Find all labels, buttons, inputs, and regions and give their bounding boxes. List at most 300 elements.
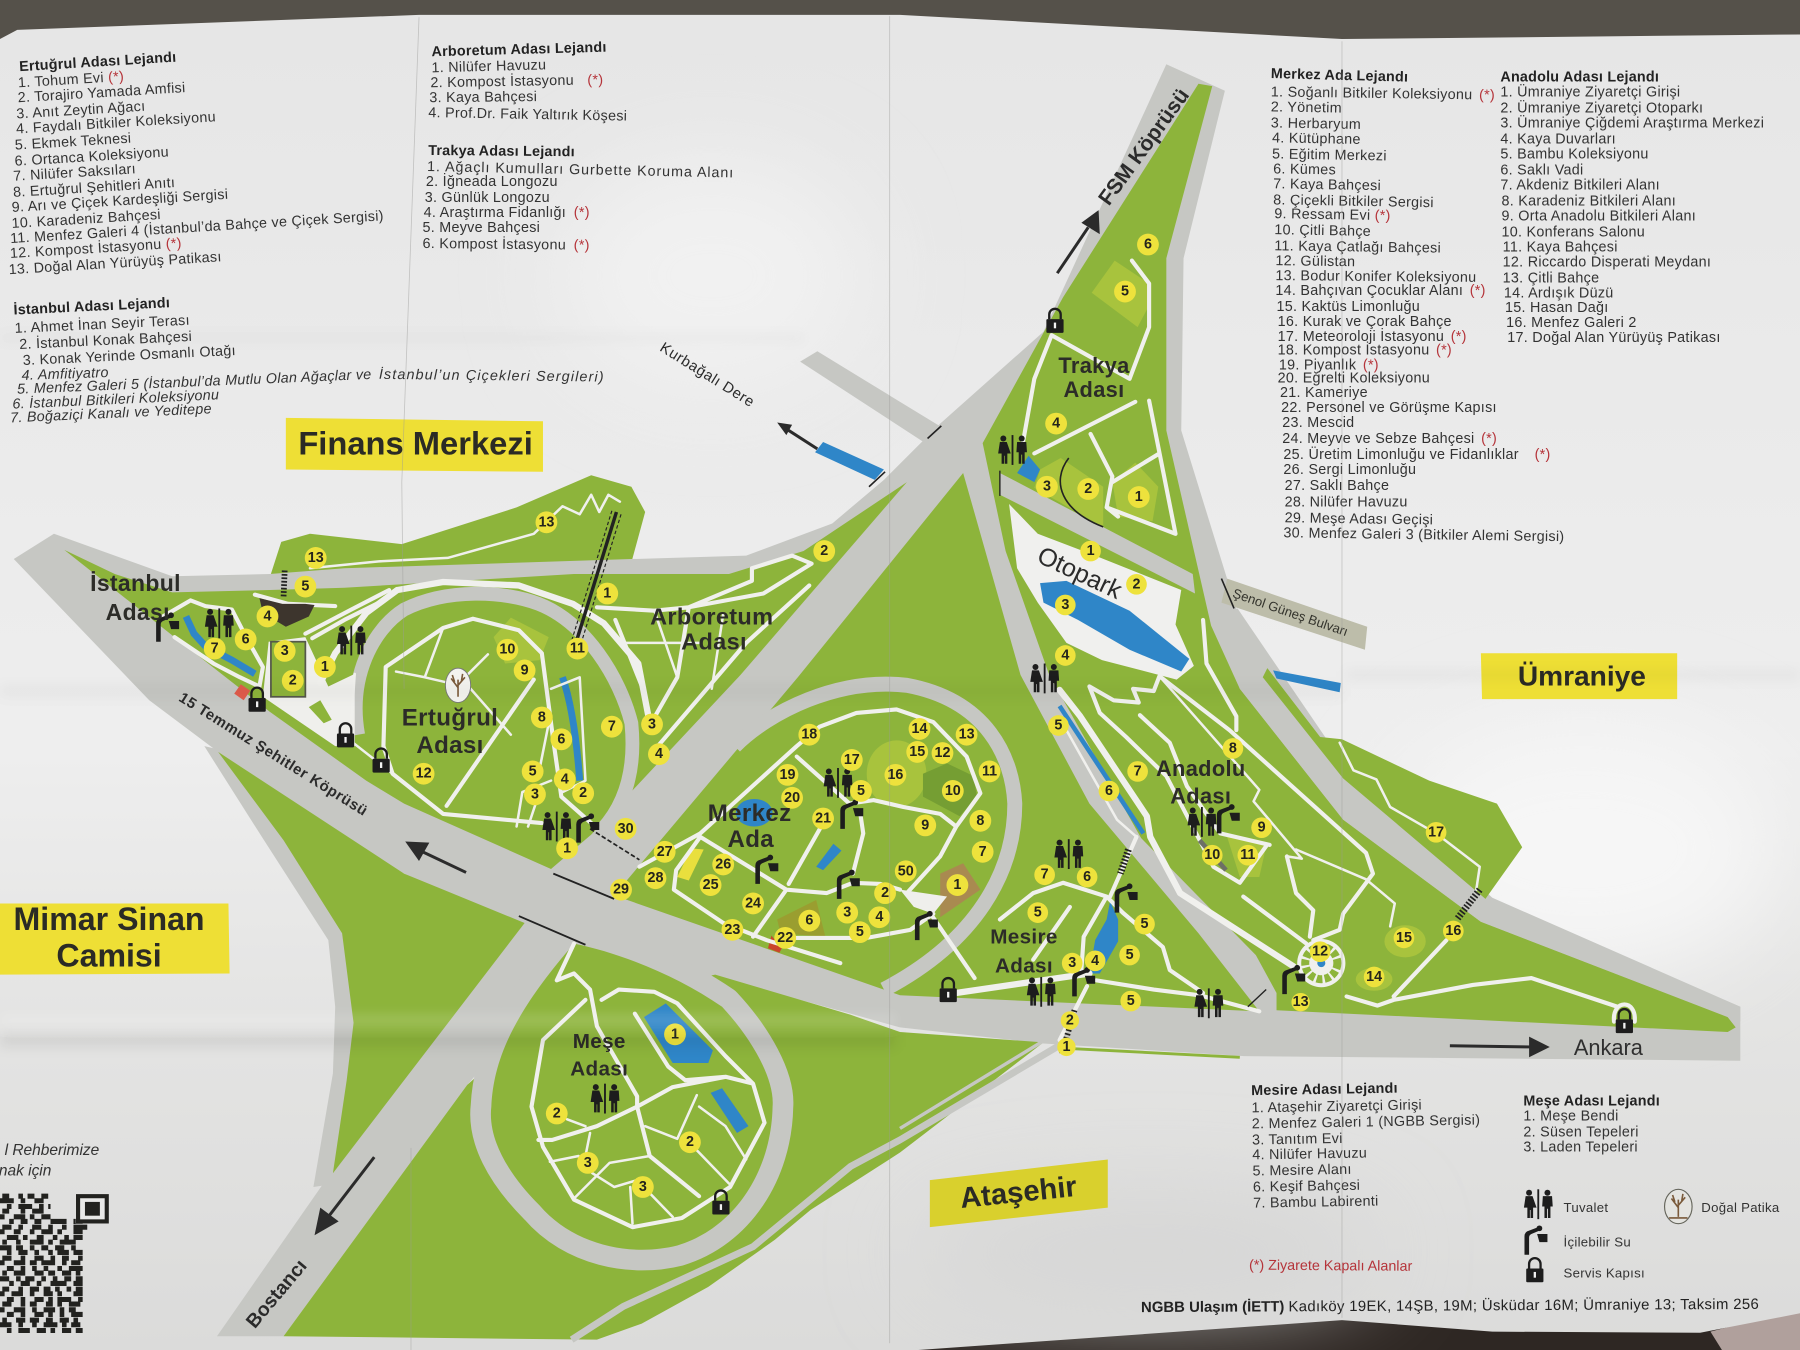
legend: Merkez Ada: 26. Sergi Limonluğu (1283, 462, 1416, 478)
numbered markers: Merkez Ada: 5 (856, 924, 864, 940)
legend: Mesire Adası: 4. Nilüfer Havuzu (1252, 1145, 1367, 1163)
yellow bed: Merkez (677, 848, 704, 880)
legend: Anadolu Adası: 6. Saklı Vadi (1500, 162, 1583, 178)
plaza: Merkez (900, 890, 947, 914)
numbered markers: İstanbul Adası: 1 (321, 659, 329, 675)
numbered markers: Ertuğrul Adası: 4 (561, 771, 569, 787)
numbered markers: Ertuğrul Adası: 13 (538, 514, 554, 530)
island name: Merkez Ada: Merkez (708, 800, 792, 827)
island name: Merkez Ada: Ada (727, 826, 774, 853)
numbered markers: Merkez Ada: 8 (976, 813, 984, 829)
legend: Anadolu Adası: 5. Bambu Koleksiyonu (1500, 146, 1649, 162)
canal: Ümraniye side (1273, 670, 1341, 692)
numbered markers: Ertuğrul Adası: 6 (557, 731, 565, 747)
numbered markers: Anadolu Adası (1048, 541, 1464, 1011)
dark table under the sheet (804, 1297, 1800, 1350)
road: Kurbağalı strip (800, 351, 941, 443)
numbered markers: Ertuğrul Adası (413, 511, 637, 859)
legend: Trakya Adası (422, 143, 734, 254)
legend: Mesire Adası: 1. Ataşehir Ziyaretçi Girişi (1251, 1097, 1422, 1116)
numbered markers: Ertuğrul Adası: 3 (531, 786, 539, 802)
numbered markers: Merkez Ada: 9 (921, 817, 929, 833)
legend: Arboretum Adası: 2. Kompost İstasyonu (*) (430, 70, 603, 91)
green: east hill (1263, 668, 1522, 899)
numbered markers: Arboretum Adası: 4 (655, 746, 663, 762)
numbered markers: Anadolu Adası: 16 (1445, 923, 1461, 939)
lake: Otopark (1040, 581, 1189, 672)
legend: Anadolu Adası: 16. Menfez Galeri 2 (1506, 315, 1637, 331)
legend: Anadolu Adası: 14. Ardışık Düzü (1504, 285, 1614, 301)
legend: Anadolu Adası: 3. Ümraniye Çiğdemi Araştırma Merkezi (1500, 113, 1764, 131)
numbered markers: Anadolu Adası: 1 (1087, 543, 1095, 559)
legend: Anadolu Adası: 12. Riccardo Disperati Meydanı (1503, 254, 1711, 270)
legend: İstanbul Adası (10, 294, 604, 426)
white area: Otopark (1009, 504, 1194, 680)
numbered markers: Anadolu Adası: 10 (1204, 847, 1220, 863)
legend: İstanbul Adası: 4. Amfitiyatro (21, 365, 109, 384)
green bed: İstanbul (309, 700, 332, 723)
QR caption: l Rehberimize (5, 1142, 100, 1159)
legend: Anadolu Adası: 7. Akdeniz Bitkileri Alanı (1500, 177, 1660, 193)
arrow: Bostancı (315, 1157, 374, 1235)
road sign: Şenol Güneş Bulvarı: Şenol Güneş Bulvarı (1231, 586, 1350, 639)
numbered markers: Anadolu Adası: 4 (1061, 647, 1069, 663)
key: natural trail: Doğal Patika (1701, 1200, 1780, 1215)
numbered markers: Arboretum Adası: 3 (648, 716, 656, 732)
pond: Meşe lake 1 (644, 1003, 713, 1063)
icon: natural trail emblem on map (445, 668, 471, 703)
legend: Mesire Adası: 5. Mesire Alanı (1252, 1162, 1352, 1179)
legend: Merkez Ada: 10. Çitli Bahçe (1274, 222, 1371, 240)
legend: Merkez Ada: 9. Ressam Evi (*) (1274, 206, 1391, 224)
legend: Mesire Adası: 6. Keşif Bahçesi (1253, 1178, 1360, 1196)
key: drinking water (1524, 1225, 1631, 1255)
patch: Trakya 1 (1112, 463, 1158, 521)
QR code (0, 1194, 109, 1330)
road ring: Merkez (735, 684, 1015, 990)
numbered markers: Ertuğrul Adası: 11 (570, 641, 585, 657)
numbered markers: Arboretum Adası: 2 (820, 543, 828, 559)
numbered markers: İstanbul Adası: 13 (308, 550, 324, 566)
key: service gate (1526, 1258, 1645, 1282)
legend: Merkez Ada: 21. Kameriye (1280, 385, 1368, 401)
numbered markers: Trakya Adası (1036, 234, 1159, 508)
numbered markers: Mesire Adası: 3 (1068, 955, 1076, 971)
road label: Ankara: Ankara (1574, 1035, 1644, 1060)
island name: Trakya Adası: Adası (1063, 377, 1125, 402)
island name: Trakya Adası: Trakya (1058, 353, 1130, 378)
district badge: Finans Merkezi (286, 418, 543, 472)
legend: Meşe Adası: Meşe Adası Lejandı (1523, 1093, 1660, 1109)
numbered markers: İstanbul Adası: 2 (289, 673, 297, 689)
legend: Meşe Adası: 1. Meşe Bendi (1523, 1108, 1619, 1124)
numbered markers: Trakya Adası: 5 (1121, 284, 1129, 300)
island name: Meşe Adası: Meşe (573, 1030, 626, 1053)
legend: Anadolu Adası: 15. Hasan Dağı (1505, 300, 1609, 316)
road label: FSM Köprüsü: FSM Köprüsü (1094, 84, 1194, 210)
numbered markers: Mesire Adası (1027, 864, 1155, 1056)
legend: Merkez Ada: 15. Kaktüs Limonluğu (1277, 299, 1420, 315)
label: Otopark: Otopark (1033, 541, 1126, 605)
numbered markers: İstanbul Adası: 5 (301, 579, 309, 595)
district badge: Finans Merkezi: Finans Merkezi (298, 425, 533, 462)
island name: Arboretum Adası: Arboretum (650, 603, 773, 629)
legend: Anadolu Adası: 13. Çitli Bahçe (1503, 270, 1599, 286)
district badge: Ümraniye (1481, 653, 1677, 699)
numbered markers: Merkez Ada: 11 (982, 763, 997, 779)
legend: Ertuğrul Adası: 13. Doğal Alan Yürüyüş Patikası (8, 249, 222, 278)
legend: Merkez Ada: 22. Personel ve Görüşme Kapısı (1281, 400, 1497, 416)
numbered markers: Merkez Ada: 26 (715, 856, 731, 872)
paper lighting (562, 161, 1779, 1303)
patch: Merkez 10 (923, 763, 977, 816)
legend: Arboretum Adası (428, 40, 627, 125)
numbered markers: Anadolu Adası: 2 (1132, 576, 1140, 592)
arrow: Ankara (1450, 1037, 1550, 1057)
red building: Merkez (768, 936, 782, 953)
legend: Ertuğrul Adası: 11. Menfez Galeri 4 (İstanbul’da Bahçe ve Çiçek Sergisi) (10, 206, 384, 247)
legend: Merkez Ada: 3. Herbaryum (1271, 115, 1361, 133)
legend: Merkez Ada: Merkez Ada Lejandı (1271, 66, 1408, 86)
trail: Finans hill (310, 495, 620, 568)
legend: Ertuğrul Adası: 3. Anıt Zeytin Ağacı (16, 99, 146, 122)
thin road strips: south-east (572, 1037, 1240, 1340)
key: toilet: Tuvalet (1564, 1200, 1608, 1215)
legend: İstanbul Adası: 2. İstanbul Konak Bahçesi (19, 327, 192, 353)
numbered markers: Ertuğrul Adası: 30 (618, 821, 634, 837)
canal: Kurbağalı Dere (815, 442, 884, 480)
numbered markers: Merkez Ada: 29 (613, 882, 629, 898)
island name: Meşe Adası: Adası (570, 1058, 628, 1081)
black bridge lines (284, 426, 1480, 1054)
green: west band with İstanbul and Ertuğrul islands (64, 482, 907, 869)
numbered markers: Meşe Adası: 1 (671, 1026, 679, 1042)
legend: Arboretum Adası: Arboretum Adası Lejandı (431, 40, 607, 60)
legend: Meşe Adası: 3. Laden Tepeleri (1523, 1139, 1638, 1155)
patch: Trakya 5 (1092, 261, 1149, 327)
numbered markers: Merkez Ada: 23 (724, 922, 740, 938)
legend: Anadolu Adası: 8. Karadeniz Bitkileri Alanı (1502, 193, 1676, 209)
legend: Merkez Ada: 19. Piyanlık (*) (1279, 358, 1379, 374)
legend: Anadolu Adası: Anadolu Adası Lejandı (1500, 70, 1659, 86)
legend: Trakya Adası: 6. Kompost İstasyonu (*) (422, 234, 590, 254)
island name: Mesire Adası: Adası (995, 954, 1053, 977)
dark strip: Anadolu 10 (1200, 840, 1226, 870)
numbered markers: Meşe Adası: 2 (686, 1134, 694, 1150)
island name: Anadolu Adası: Anadolu (1156, 756, 1246, 781)
numbered markers: Merkez Ada: 16 (887, 767, 903, 783)
numbered markers: Mesire Adası: 5 (1127, 993, 1135, 1009)
legend: Trakya Adası: 5. Meyve Bahçesi (422, 220, 540, 236)
numbered markers: Ertuğrul Adası: 2 (579, 785, 587, 801)
transport note: NGBB Ulaşım (İETT) Kadıköy 19EK, 14ŞB, 19M; Üsküdar 16M; Ümraniye 13; Taksim 256 (1141, 1295, 1759, 1316)
numbered markers: Trakya Adası: 3 (1043, 479, 1051, 495)
numbered markers: Anadolu Adası: 13 (1293, 994, 1309, 1010)
pond: Anadolu channel (1060, 706, 1143, 833)
arrow: FSM (1057, 210, 1100, 273)
island name: Ertuğrul Adası: Ertuğrul (402, 705, 498, 732)
paths: Ertuğrul (383, 619, 591, 823)
legend: Merkez Ada: 5. Eğitim Merkezi (1272, 146, 1387, 164)
road: Meşe ring (491, 944, 773, 1250)
legend: Anadolu Adası: 1. Ümraniye Ziyaretçi Girişi (1500, 82, 1680, 100)
legend: Ertuğrul Adası (0, 38, 386, 278)
numbered markers: Merkez Ada: 1 (953, 877, 961, 893)
numbered markers: Merkez Ada (610, 718, 1000, 949)
legend: Merkez Ada: 4. Kütüphane (1272, 130, 1361, 148)
numbered markers: İstanbul Adası (204, 547, 336, 692)
legend: Anadolu Adası (1500, 70, 1764, 346)
numbered markers: Merkez Ada: 15 (909, 744, 925, 760)
legend: Trakya Adası: 3. Günlük Longozu (425, 190, 550, 206)
numbered markers: Anadolu Adası: 5 (1054, 718, 1062, 734)
numbered markers: Merkez Ada: 21 (815, 810, 831, 826)
legend: Mesire Adası (1251, 1079, 1482, 1212)
numbered markers: Mesire Adası: 5 (1034, 905, 1042, 921)
numbered markers: Meşe Adası: 2 (553, 1106, 561, 1122)
numbered markers: Mesire Adası: 1 (1062, 1039, 1070, 1055)
garden box: İstanbul 2-3 (271, 642, 305, 697)
island name: Anadolu Adası: Adası (1170, 784, 1231, 809)
legend: Mesire Adası: 3. Tanıtım Evi (1252, 1131, 1343, 1149)
key: drinking water: İçilebilir Su (1564, 1235, 1631, 1250)
numbered markers: Trakya Adası: 4 (1052, 416, 1060, 432)
numbered markers: Anadolu Adası: 8 (1229, 740, 1237, 756)
key: natural trail (1665, 1189, 1780, 1224)
paths: Meşe (532, 944, 765, 1227)
island name: İstanbul Adası: İstanbul (90, 570, 181, 596)
district badge: Mimar Sinan Camisi (0, 901, 230, 975)
legend: Merkez Ada: 7. Kaya Bahçesi (1273, 176, 1381, 194)
legend: Meşe Adası (1523, 1093, 1660, 1155)
district badge: Mimar Sinan Camisi: Camisi (56, 938, 162, 974)
district badge: Ataşehir: Ataşehir (959, 1171, 1078, 1215)
trail loop: Ankara gate (1614, 1004, 1635, 1022)
legend: Merkez Ada: 12. Gülistan (1275, 253, 1355, 270)
numbered markers: Anadolu Adası: 11 (1240, 847, 1255, 863)
island name: Ertuğrul Adası: Adası (416, 732, 484, 759)
road sign: Şenol Güneş Bulvarı (1221, 579, 1367, 650)
green: south-west triangle (218, 752, 525, 1173)
pond: Mesire lake (1089, 901, 1118, 973)
legend: Ertuğrul Adası: 2. Torajiro Yamada Amfisi (17, 80, 186, 106)
paths: Merkez (639, 709, 980, 963)
numbered markers: Merkez Ada: 3 (843, 905, 851, 921)
patch: Merkez 6 (777, 900, 825, 937)
legend: Ertuğrul Adası: 6. Ortanca Koleksiyonu (14, 144, 169, 170)
legend: Ertuğrul Adası: 4. Faydalı Bitkiler Koleksiyonu (16, 109, 216, 137)
arrow: 15 Temmuz (405, 841, 466, 872)
numbered markers: Mesire Adası: 5 (1126, 947, 1134, 963)
legend: Anadolu Adası: 11. Kaya Bahçesi (1503, 239, 1618, 255)
legend: Mesire Adası: Mesire Adası Lejandı (1251, 1081, 1398, 1099)
numbered markers: Mesire Adası: 2 (1066, 1013, 1074, 1029)
legend: Merkez Ada: 27. Saklı Bahçe (1285, 478, 1389, 494)
island: Meşe Adası (491, 944, 773, 1250)
road label: 15 Temmuz Şehitler Köprüsü: 15 Temmuz Şehitler Köprüsü (176, 689, 371, 820)
road: Şenol Güneş Bulvarı crossing (1000, 473, 1195, 593)
numbered markers: Trakya Adası: 1 (1135, 489, 1143, 505)
fold lines (402, 16, 1342, 1350)
legend: Anadolu Adası: 10. Konferans Salonu (1502, 224, 1645, 240)
numbered markers: Merkez Ada: 2 (881, 885, 889, 901)
numbered markers: Merkez Ada: 10 (945, 783, 961, 799)
legend: Anadolu Adası: 4. Kaya Duvarları (1500, 131, 1616, 147)
numbered markers: Merkez Ada: 19 (780, 767, 795, 783)
numbered markers: İstanbul Adası: 7 (211, 641, 219, 657)
numbered markers: Meşe Adası: 3 (639, 1179, 647, 1195)
green hill with walking trail (270, 475, 645, 577)
patch: Ertuğrul 10 (494, 618, 549, 664)
legend: Merkez Ada: 30. Menfez Galeri 3 (Bitkiler Alemi Sergisi) (1283, 525, 1565, 545)
numbered markers: Anadolu Adası: 6 (1105, 783, 1113, 799)
numbered markers: Ertuğrul Adası: 5 (529, 763, 537, 779)
numbered markers: Meşe Adası: 3 (584, 1155, 592, 1171)
numbered markers: Merkez Ada: 5 (857, 783, 865, 799)
legend: Mesire Adası: 7. Bambu Labirenti (1253, 1193, 1379, 1212)
road ring: Ertuğrul (356, 594, 632, 829)
pond: Ertuğrul stream (562, 677, 580, 781)
district badge: Mimar Sinan Camisi: Mimar Sinan (14, 901, 205, 937)
legend: Trakya Adası: 4. Araştırma Fidanlığı (*) (424, 205, 590, 221)
patch: Trakya 2-3 (1034, 458, 1103, 527)
numbered markers: Anadolu Adası: 17 (1428, 824, 1444, 840)
pond: Merkez small (816, 844, 841, 870)
numbered markers: Ertuğrul Adası: 7 (608, 719, 616, 735)
island name: Arboretum Adası: Adası (681, 629, 747, 655)
numbered markers: Anadolu Adası: 3 (1061, 597, 1069, 613)
legend: Ertuğrul Adası: 7. Nilüfer Saksıları (13, 161, 136, 185)
legend: Arboretum Adası: 1. Nilüfer Havuzu (431, 57, 546, 76)
road: Ümraniye strip lower branch (1219, 608, 1740, 1022)
numbered markers: Mesire Adası: 7 (1041, 867, 1049, 883)
numbered markers: Ertuğrul Adası: 12 (416, 766, 432, 782)
numbered markers: Ertuğrul Adası: 9 (521, 662, 529, 678)
numbered markers: Merkez Ada: 27 (657, 844, 673, 860)
numbered markers: Merkez Ada: 12 (935, 745, 950, 761)
numbered markers: Merkez Ada: 17 (844, 752, 860, 768)
numbered markers: Ertuğrul Adası: 10 (499, 642, 515, 658)
legend: Merkez Ada (1271, 66, 1565, 545)
icons: service gates on map (249, 309, 1633, 1215)
numbered markers: Merkez Ada: 14 (912, 721, 928, 737)
legend: Meşe Adası: 2. Süsen Tepeleri (1523, 1124, 1639, 1140)
legend: Merkez Ada: 29. Meşe Adası Geçişi (1285, 510, 1433, 528)
legend: Ertuğrul Adası: Ertuğrul Adası Lejandı (19, 50, 177, 75)
legend: Merkez Ada: 1. Soğanlı Bitkiler Koleksiyonu (*) (1271, 84, 1495, 104)
legend: Anadolu Adası: 9. Orta Anadolu Bitkileri Alanı (1502, 208, 1696, 224)
numbered markers: Ertuğrul Adası: 8 (538, 709, 546, 725)
numbered markers: Merkez Ada: 18 (801, 727, 817, 743)
paths: Trakya (1023, 261, 1176, 534)
legend: İstanbul Adası: 7. Boğaziçi Kanalı ve Yeditepe (10, 401, 212, 426)
numbered markers: Merkez Ada: 50 (898, 863, 914, 879)
paths: Arboretum (597, 556, 812, 746)
legend: Merkez Ada: 17. Meteoroloji İstasyonu (*) (1278, 327, 1467, 345)
district badge: Ataşehir (930, 1159, 1108, 1227)
legend: İstanbul Adası: 5. Menfez Galeri 5 (İstanbul’da Mutlu Olan Ağaçlar ve (17, 366, 372, 398)
legend: İstanbul Adası: İstanbul’un Çiçekleri Sergileri) (379, 366, 604, 386)
fabric at bottom right corner (1710, 1309, 1800, 1350)
legend: Trakya Adası: 1. Ağaçlı Kumulları Gurbette Koruma Alanı (427, 159, 734, 181)
numbered markers: Mesire Adası: 6 (1083, 869, 1091, 885)
note: closed areas: (*) Ziyarete Kapalı Alanlar (1249, 1258, 1413, 1275)
legend: Ertuğrul Adası: 10. Karadeniz Bahçesi (11, 207, 161, 232)
legend: İstanbul Adası: İstanbul Adası Lejandı (13, 294, 170, 319)
numbered markers: Anadolu Adası: 15 (1396, 930, 1412, 946)
pond: İstanbul chain (186, 616, 255, 674)
patch: Anadolu 15 (1384, 925, 1426, 957)
pond: Meşe lake 2 (711, 1088, 748, 1133)
legend: Merkez Ada: 2. Yönetim (1271, 99, 1342, 117)
pond: Trakya (1017, 456, 1040, 482)
patch: Anadolu 14 (1356, 968, 1392, 991)
legend: Arboretum Adası: 4. Prof.Dr. Faik Yaltırık Köşesi (428, 105, 627, 125)
numbered markers: Merkez Ada: 25 (703, 877, 719, 893)
numbered markers: Ertuğrul Adası: 1 (563, 840, 571, 856)
legend: Merkez Ada: 11. Kaya Çatlağı Bahçesi (1274, 238, 1441, 257)
numbered markers: Merkez Ada: 6 (805, 913, 813, 929)
legend: Merkez Ada: 25. Üretim Limonluğu ve Fidanlıklar (*) (1283, 445, 1551, 463)
icons: drinking water on map (156, 612, 1305, 996)
numbered markers: Mesire Adası: 5 (1141, 916, 1149, 932)
legend: Merkez Ada: 16. Kurak ve Çorak Bahçe (1278, 314, 1452, 330)
numbered markers: Trakya Adası: 6 (1144, 237, 1152, 253)
numbered markers: Meşe Adası (546, 1023, 701, 1198)
paper creases and shading (0, 335, 1800, 1047)
legend: İstanbul Adası: 3. Konak Yerinde Osmanlı Otağı (22, 343, 236, 369)
legend: Anadolu Adası: 2. Ümraniye Ziyaretçi Otoparkı (1500, 99, 1703, 117)
legend: Merkez Ada: 20. Eğrelti Koleksiyonu (1278, 370, 1430, 386)
numbered markers: Merkez Ada: 22 (777, 930, 793, 946)
numbered markers: Mesire Adası: 4 (1091, 953, 1099, 969)
plaza disc: Anadolu 12 (1297, 939, 1345, 987)
icons: toilets on map (205, 435, 1223, 1114)
key: toilet (1524, 1189, 1608, 1219)
legend: Ertuğrul Adası: 1. Tohum Evi (*) (17, 69, 125, 91)
legend: Merkez Ada: 18. Kompost İstasyonu (*) (1278, 341, 1452, 359)
numbered markers: Trakya Adası: 2 (1084, 481, 1092, 497)
QR caption: nak için (0, 1163, 51, 1180)
key: service gate: Servis Kapısı (1564, 1266, 1645, 1281)
paths: Mesire (948, 973, 1089, 994)
paths: Anadolu (1060, 690, 1294, 967)
legend: Merkez Ada: 8. Çiçekli Bitkiler Sergisi (1273, 192, 1434, 211)
legend: Merkez Ada: 23. Mescid (1282, 415, 1354, 431)
label: Kurbağalı Dere: Kurbağalı Dere (657, 339, 758, 411)
green: south east wedge (284, 975, 1043, 1340)
red square: İstanbul (234, 684, 250, 700)
white plaza: İstanbul (263, 637, 355, 746)
numbered markers: Anadolu Adası: 12 (1312, 944, 1328, 960)
legend: Merkez Ada: 13. Bodur Konifer Koleksiyonu (1275, 268, 1477, 286)
arrow: Kurbağalı Dere (777, 422, 817, 449)
legend: Trakya Adası: Trakya Adası Lejandı (428, 143, 575, 160)
legend: Mesire Adası: 2. Menfez Galeri 1 (NGBB Sergisi) (1252, 1112, 1480, 1132)
legend: Merkez Ada: 6. Kümes (1273, 161, 1336, 178)
legend: Merkez Ada: 24. Meyve ve Sebze Bahçesi (*) (1282, 431, 1497, 447)
numbered markers: Arboretum Adası (596, 540, 835, 765)
brown area: Merkez 1 (940, 863, 980, 917)
numbered markers: Anadolu Adası: 9 (1258, 820, 1266, 836)
numbered markers: Merkez Ada: 20 (784, 790, 800, 806)
numbered markers: Anadolu Adası: 14 (1366, 969, 1382, 985)
numbered markers: Merkez Ada: 4 (875, 909, 883, 925)
green: central triangle (614, 473, 1259, 1011)
legend: Merkez Ada: 28. Nilüfer Havuzu (1285, 494, 1408, 510)
legend: Trakya Adası: 2. İğneada Longozu (426, 172, 558, 190)
amphitheatre: İstanbul (259, 598, 315, 627)
